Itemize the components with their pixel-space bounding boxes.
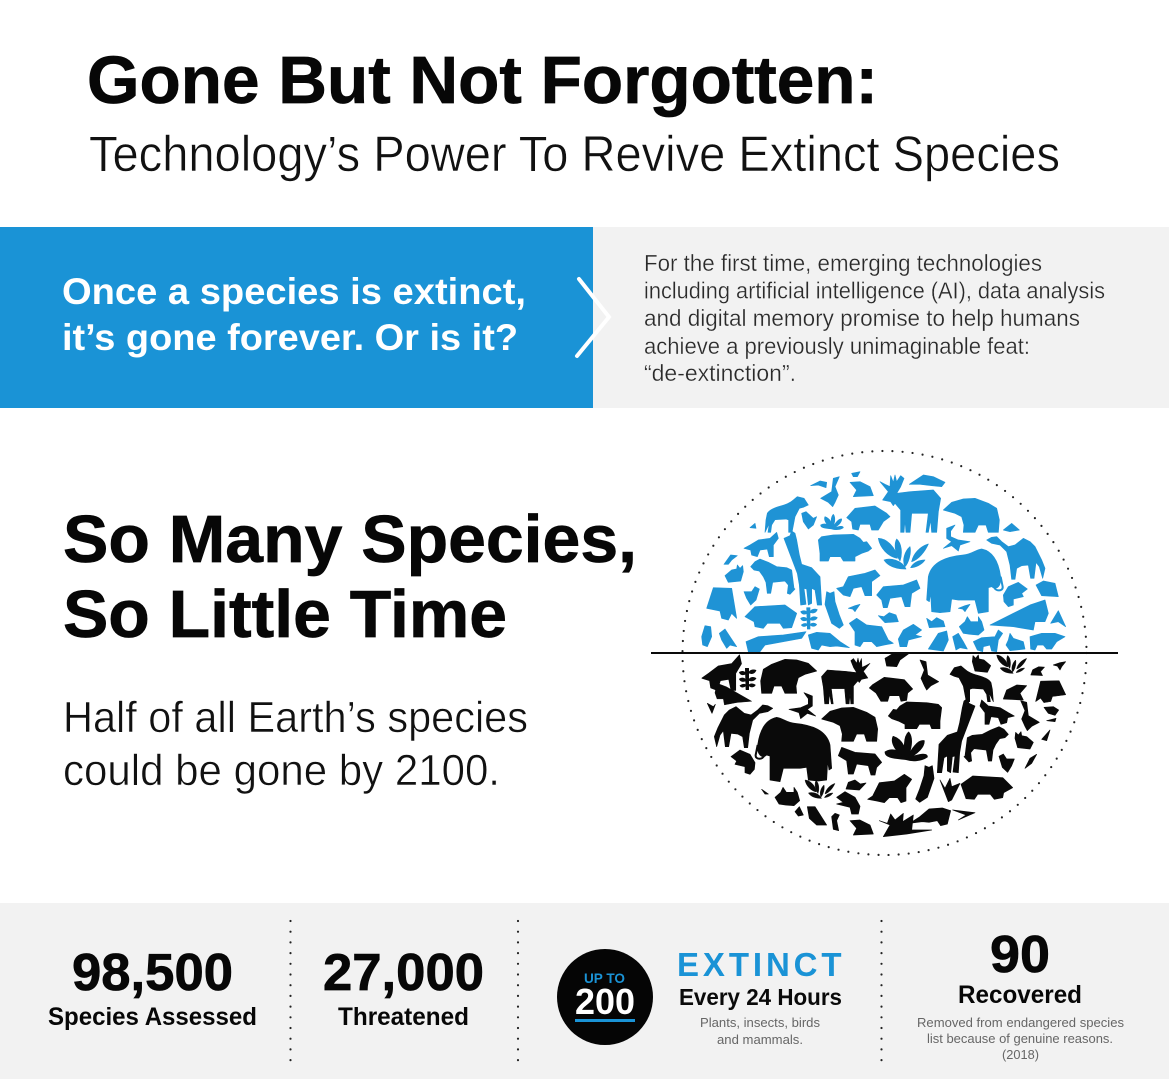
badge: up to 200: 200 xyxy=(575,981,635,1022)
main title: Gone But Not Forgotten: xyxy=(87,43,878,118)
stat: extinct every 24 hours: Every 24 Hours xyxy=(679,984,842,1010)
stat: extinct every 24 hours: EXTINCT xyxy=(677,946,845,983)
section statement xyxy=(63,693,528,795)
banner paragraph: For the first time, emerging technologies xyxy=(644,250,1042,276)
banner paragraph: “de-extinction”. xyxy=(644,360,796,386)
lost species: black animal silhouettes xyxy=(702,653,1066,837)
stat: recovered: 90 xyxy=(990,926,1050,984)
banner paragraph: including artificial intelligence (AI), data analysis xyxy=(644,278,1105,304)
dotted divider xyxy=(517,921,519,1065)
section heading: So Little Time xyxy=(63,577,507,652)
stat: recovered: Recovered xyxy=(958,981,1082,1009)
divider line xyxy=(651,652,1118,654)
title block xyxy=(87,43,1060,182)
stat: recovered: (2018) xyxy=(1002,1047,1039,1062)
badge: up to 200 xyxy=(557,949,653,1045)
surviving species: blue animal silhouettes xyxy=(702,472,1066,652)
stat: species assessed xyxy=(48,944,257,1031)
banner headline: it’s gone forever. Or is it? xyxy=(62,317,518,358)
icon: chevron arrow xyxy=(577,279,609,356)
banner paragraph: achieve a previously unimaginable feat: xyxy=(644,333,1030,359)
stat: extinct every 24 hours xyxy=(677,946,845,1047)
stat: threatened: Threatened xyxy=(338,1003,469,1031)
section heading: So Many Species, xyxy=(63,502,637,577)
stat: threatened xyxy=(323,944,484,1031)
stat: extinct every 24 hours: Plants, insects, birds xyxy=(700,1015,820,1030)
section heading xyxy=(63,502,637,652)
chart: species globe split in half xyxy=(651,451,1118,855)
panel: intro banner xyxy=(0,227,1169,408)
dotted divider xyxy=(880,921,883,1065)
stat: recovered: list because of genuine reasons. xyxy=(927,1031,1113,1046)
stat: threatened: 27,000 xyxy=(323,944,484,1002)
dotted circle outline xyxy=(682,451,1086,855)
stat: species assessed: Species Assessed xyxy=(48,1003,257,1031)
banner paragraph: and digital memory promise to help humans xyxy=(644,305,1080,331)
banner headline: Once a species is extinct, xyxy=(62,271,526,312)
banner paragraph xyxy=(644,250,1105,386)
dotted divider xyxy=(289,921,292,1065)
banner headline xyxy=(62,271,526,358)
panel: statistics footer xyxy=(0,903,1169,1079)
subtitle: Technology’s Power To Revive Extinct Species xyxy=(89,126,1060,182)
stat: recovered xyxy=(917,926,1124,1062)
stat: extinct every 24 hours: and mammals. xyxy=(717,1032,803,1047)
section statement: could be gone by 2100. xyxy=(63,746,500,795)
stat: species assessed: 98,500 xyxy=(72,944,233,1002)
section statement: Half of all Earth’s species xyxy=(63,693,528,742)
badge: up to 200: UP TO xyxy=(584,970,625,986)
stat: recovered: Removed from endangered species xyxy=(917,1015,1124,1030)
